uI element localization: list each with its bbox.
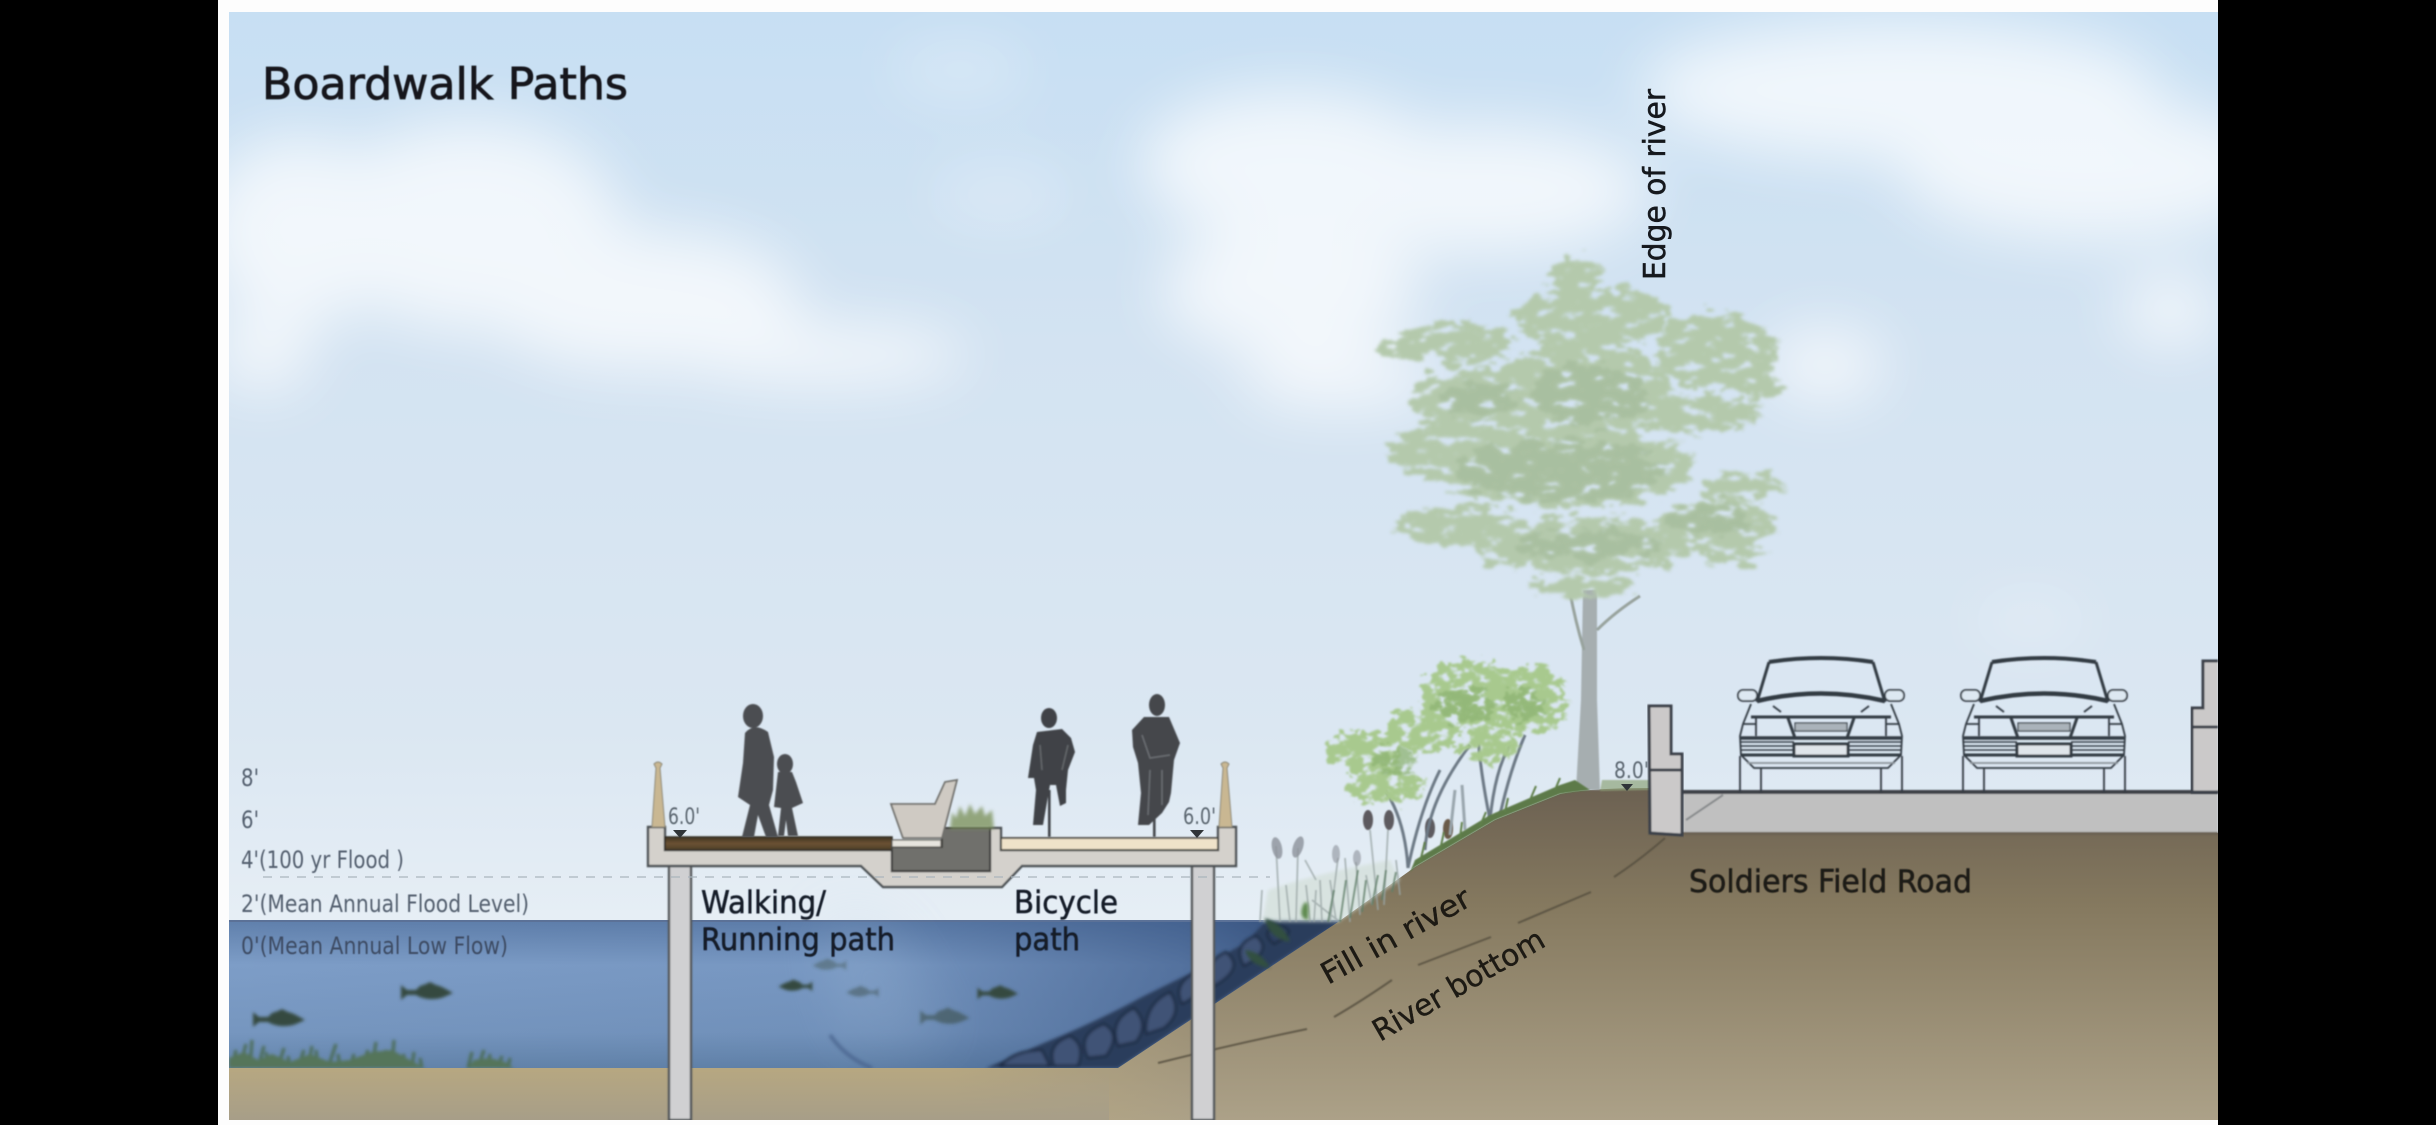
silhouette: adult and child walking <box>738 704 803 837</box>
planter grass <box>950 804 994 829</box>
bank grasses <box>1410 778 1650 872</box>
planter box <box>892 828 990 871</box>
label: bicycle path: Bicycle <box>1014 885 1118 921</box>
left pillar <box>669 866 691 1120</box>
label: walking running path: Walking/ <box>701 885 827 921</box>
label: soldiers field road: Soldiers Field Road <box>1689 864 1972 900</box>
road slab <box>1650 790 2218 835</box>
flood level dashed line <box>263 876 1270 878</box>
spot elevations <box>668 759 1649 830</box>
elevation labels: 6' <box>241 806 259 834</box>
underwater grasses <box>229 1040 514 1068</box>
elevation labels: 8' <box>241 764 259 792</box>
elevation labels <box>241 764 529 960</box>
tree inner shade <box>1440 365 1750 559</box>
label: fill in river: Fill in river <box>1315 881 1478 992</box>
bicycle path surface <box>1001 838 1218 850</box>
right railing <box>1219 762 1232 827</box>
sand shading <box>229 1097 1109 1120</box>
shrub foliage <box>1327 661 1568 803</box>
water <box>229 920 1349 1070</box>
shrubs <box>1327 661 1568 868</box>
elevation labels: 0'(Mean Annual Low Flow) <box>241 932 508 960</box>
label: bicycle path: path <box>1014 922 1080 958</box>
sky background <box>229 12 2218 920</box>
waterline leaves <box>1245 902 1308 968</box>
elevation labels: 4'(100 yr Flood ) <box>241 846 404 874</box>
left railing <box>652 762 665 827</box>
label: river bottom: River bottom <box>1366 922 1551 1049</box>
clouds <box>229 12 2218 426</box>
right road wall <box>2192 661 2218 792</box>
label: walking running path: Running path <box>701 922 895 958</box>
right pillar <box>1192 866 1214 1120</box>
shrub inner shade <box>1373 687 1545 772</box>
label: bicycle path <box>1014 885 1118 958</box>
bench base <box>892 840 941 847</box>
concrete deck <box>648 827 1236 887</box>
title: Boardwalk Paths <box>262 59 628 110</box>
left road wall <box>1649 706 1682 835</box>
shrub branches <box>1385 735 1525 868</box>
fill boundary line <box>1158 838 1665 1063</box>
edge of river dashed line <box>1689 44 1691 792</box>
tree: background tree <box>1375 259 1784 790</box>
level marker triangles <box>673 784 1633 838</box>
tree trunk <box>1570 590 1640 790</box>
car 2 <box>1961 658 2127 792</box>
bench <box>891 780 957 838</box>
label: walking running path <box>701 885 895 958</box>
walking path surface <box>665 837 892 850</box>
silhouette: cyclist 1 <box>1028 708 1075 837</box>
elevation labels: 2'(Mean Annual Flood Level) <box>241 890 529 918</box>
spot elevations: 6.0' <box>1183 805 1216 830</box>
fish <box>253 958 1018 1027</box>
boardwalk structure <box>648 762 1236 1120</box>
earth: river bed, slope and road fill <box>967 788 2218 1120</box>
tree foliage <box>1375 259 1784 596</box>
spot elevations: 6.0' <box>668 805 700 830</box>
reeds and cattails <box>1260 810 1453 922</box>
sand river bottom <box>229 1050 1145 1092</box>
rock riprap <box>986 920 1340 1068</box>
label: edge of river: Edge of river <box>1638 88 1673 280</box>
spot elevations: 8.0' <box>1614 759 1649 784</box>
car 1 <box>1738 658 1904 792</box>
silhouette: cyclist 2 <box>1132 694 1180 837</box>
